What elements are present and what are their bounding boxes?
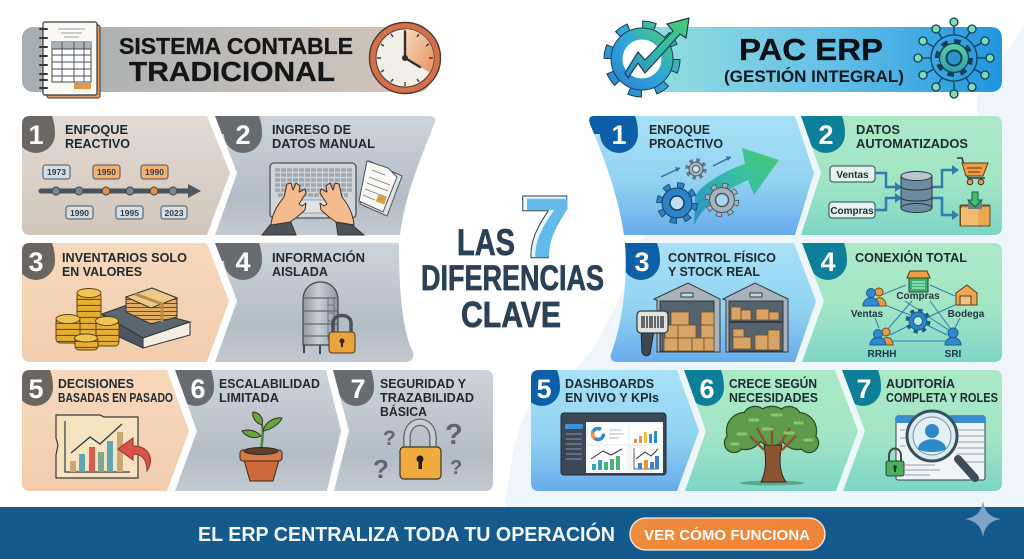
- badge 6: [680, 370, 724, 406]
- title: tradicional: TRADICIONAL: [129, 56, 335, 87]
- panel: left 4 informacion aislada: [210, 243, 413, 362]
- heading: las 7 diferencias clave: [421, 182, 604, 335]
- text: escalabilidad limitada: LIMITADA: [219, 391, 279, 405]
- subtitle: gestion integral: (GESTIÓN INTEGRAL): [724, 67, 904, 86]
- panel: right 2 datos automatizados: [796, 116, 1002, 235]
- panel: right 7 auditoria: [838, 370, 1002, 491]
- text: informacion aislada: AISLADA: [272, 265, 328, 279]
- icon: wall clock: [370, 22, 440, 94]
- header: pac erp: [609, 18, 1002, 98]
- text: auditoria completa y roles: [886, 376, 998, 405]
- text: ingreso de datos manual: INGRESO DE: [272, 123, 351, 137]
- badge 2: [801, 116, 845, 153]
- text: control fisico y stock real: Y STOCK REAL: [668, 265, 760, 279]
- diagram: connected modules: Compras: [896, 291, 940, 302]
- title: sistema contable: SISTEMA CONTABLE: [119, 33, 353, 59]
- text: enfoque reactivo: ENFOQUE: [65, 123, 128, 137]
- badge 5: 5: [28, 374, 44, 404]
- diagram: connected modules: [851, 271, 985, 360]
- text: ingreso de datos manual: DATOS MANUAL: [272, 137, 375, 151]
- icon: barcode scanner: [637, 311, 668, 356]
- text: decisiones basadas en pasado: DECISIONES: [58, 377, 134, 391]
- icon: small plant in pot: [240, 412, 282, 481]
- badge 2: 2: [818, 120, 834, 150]
- badge 5: [22, 370, 53, 406]
- text: datos automatizados: [856, 123, 968, 151]
- text: seguridad y trazabilidad basica: TRAZABILIDAD: [380, 391, 474, 405]
- diagram: data flow: Ventas: [836, 170, 869, 181]
- chart: timeline: 1990: [145, 167, 164, 177]
- icon: document: [359, 161, 402, 216]
- badge 7: [333, 370, 374, 406]
- button: ver como funciona: VER CÓMO FUNCIONA: [644, 526, 810, 544]
- chart: timeline: 1990: [70, 208, 89, 218]
- text: crece segun necesidades: CRECE SEGÚN: [729, 376, 817, 391]
- text: seguridad y trazabilidad basica: SEGURIDAD Y: [380, 377, 467, 391]
- panel: left 3 inventarios: [17, 243, 229, 362]
- big number 7: 7: [522, 182, 568, 273]
- panel: right 6 crece: [680, 370, 858, 491]
- diagram: connected modules: RRHH: [868, 349, 896, 360]
- panel: right 1 enfoque proactivo: [585, 116, 814, 235]
- badge 3: [22, 243, 55, 280]
- text: dashboards en vivo y kpis: [565, 377, 659, 405]
- text: enfoque reactivo: [65, 123, 130, 151]
- header: sistema contable tradicional: [22, 22, 440, 98]
- badge 3: 3: [28, 247, 44, 277]
- text: decisiones basadas en pasado: BASADAS EN PASADO: [58, 391, 173, 405]
- badge 4: 4: [820, 247, 836, 277]
- text: auditoria completa y roles: COMPLETA Y ROLES: [886, 391, 998, 405]
- icon: padlock with question marks: ?: [445, 419, 463, 451]
- text: escalabilidad limitada: ESCALABILIDAD: [219, 377, 320, 391]
- icon: padlock with question marks: ?: [383, 427, 396, 450]
- chart: timeline: 1973: [47, 167, 66, 177]
- heading: las 7 diferencias clave: DIFERENCIAS: [421, 259, 604, 298]
- diagram: connected modules: Bodega: [948, 309, 985, 320]
- text: ingreso de datos manual: [272, 123, 375, 151]
- badge 4: [210, 243, 262, 280]
- badge 1: 1: [611, 120, 627, 150]
- text: crece segun necesidades: NECESIDADES: [729, 391, 818, 405]
- big number 7: 7: [524, 183, 570, 274]
- panel: left 6 escalabilidad: [170, 370, 341, 491]
- chart: timeline: [41, 165, 201, 219]
- icon: book and banknotes: [102, 288, 190, 348]
- icon: sparkle star: [965, 501, 1001, 537]
- diagram: connected modules: Ventas: [851, 309, 884, 320]
- icon: audit window with magnifier: [886, 411, 985, 480]
- panel: left 7 seguridad: [328, 370, 493, 491]
- icon: box with arrow: [960, 192, 990, 226]
- icon: network gear: [914, 18, 994, 98]
- icon: ledger notebook: [40, 22, 100, 98]
- badge 6: 6: [190, 374, 206, 404]
- text: enfoque proactivo: ENFOQUE: [649, 123, 710, 137]
- heading: las 7 diferencias clave: CLAVE: [461, 294, 561, 335]
- panel: left 1 enfoque reactivo: [17, 116, 230, 235]
- text: informacion aislada: INFORMACIÓN: [272, 250, 365, 265]
- text: enfoque proactivo: PROACTIVO: [649, 137, 723, 151]
- icon: warehouses: [654, 283, 788, 352]
- diagram: data flow: Compras: [830, 206, 874, 217]
- badge 6: 6: [699, 374, 715, 404]
- panel: left 5 decisiones: [17, 370, 189, 491]
- text: enfoque proactivo: [649, 123, 723, 151]
- badge 4: [802, 243, 847, 280]
- badge 6: [175, 370, 214, 406]
- text: datos automatizados: DATOS: [856, 123, 900, 137]
- badge 1: [22, 116, 55, 153]
- icon: keyboard with hands: [262, 163, 364, 235]
- text: dashboards en vivo y kpis: EN VIVO Y KPIs: [565, 391, 659, 405]
- arrow: red back arrow: [118, 438, 150, 471]
- icon: coin stacks: [56, 288, 119, 350]
- heading: las 7 diferencias clave: LAS: [457, 222, 515, 263]
- badge 4: 4: [235, 247, 251, 277]
- text: inventarios solo en valores: EN VALORES: [62, 265, 142, 279]
- badge 1: 1: [28, 120, 44, 150]
- text: seguridad y trazabilidad basica: BÁSICA: [380, 404, 427, 419]
- panel: left 2 ingreso de datos manual: [210, 116, 435, 235]
- diagram: connected modules: SRI: [945, 349, 962, 360]
- icon: shopping cart: [957, 158, 988, 185]
- badge 5: [531, 370, 560, 406]
- icon: growth arrow with gears: [660, 148, 779, 226]
- text: inventarios solo en valores: [62, 251, 187, 279]
- icon: padlock with question marks: [373, 419, 463, 484]
- text: crece segun necesidades: [729, 376, 818, 405]
- badge 3: [625, 243, 660, 280]
- panel: right 3 control fisico: [611, 243, 816, 362]
- text: dashboards en vivo y kpis: DASHBOARDS: [565, 377, 654, 391]
- chart: dashboard screen: [561, 413, 666, 475]
- text: informacion aislada: [272, 250, 365, 279]
- icon: tree: [725, 407, 818, 486]
- icon: gear with growth arrow: [609, 18, 689, 92]
- badge 7: 7: [350, 374, 366, 404]
- text: conexion total: CONEXIÓN TOTAL: [855, 250, 967, 265]
- badge 2: 2: [235, 120, 251, 150]
- text: control fisico y stock real: CONTROL FÍSICO: [668, 250, 776, 265]
- badge 7: 7: [856, 374, 872, 404]
- badge 7: [838, 370, 881, 406]
- text: seguridad y trazabilidad basica: [380, 377, 474, 419]
- badge 5: 5: [536, 374, 552, 404]
- text: decisiones basadas en pasado: [58, 377, 173, 405]
- footer message: EL ERP CENTRALIZA TODA TU OPERACIÓN: [198, 522, 615, 546]
- panel: right 4 conexion total: [796, 243, 1002, 362]
- footer banner: [0, 501, 1024, 559]
- text: inventarios solo en valores: INVENTARIOS SOLO: [62, 251, 187, 265]
- text: datos automatizados: AUTOMATIZADOS: [856, 137, 968, 151]
- text: auditoria completa y roles: AUDITORÍA: [886, 376, 955, 391]
- chart: bars on parchment: [56, 415, 138, 478]
- text: escalabilidad limitada: [219, 377, 320, 405]
- badge 2: [210, 116, 262, 153]
- big number 7: 7: [522, 182, 568, 273]
- chart: timeline: 1950: [97, 167, 116, 177]
- panel: right 5 dashboards: [524, 370, 699, 491]
- button: ver como funciona: [630, 518, 825, 550]
- badge 3: 3: [634, 247, 650, 277]
- title: pac erp: PAC ERP: [739, 32, 883, 67]
- icon: padlock with question marks: ?: [450, 457, 462, 479]
- diagram: data flow: [829, 165, 959, 220]
- icon: silo: [303, 282, 338, 354]
- icon: padlock: [329, 316, 355, 353]
- text: control fisico y stock real: [668, 250, 776, 279]
- chart: timeline: 2023: [165, 208, 184, 218]
- badge 1: [585, 116, 638, 153]
- icon: padlock with question marks: ?: [373, 454, 389, 484]
- chart: timeline: 1995: [120, 208, 139, 218]
- text: enfoque reactivo: REACTIVO: [65, 137, 130, 151]
